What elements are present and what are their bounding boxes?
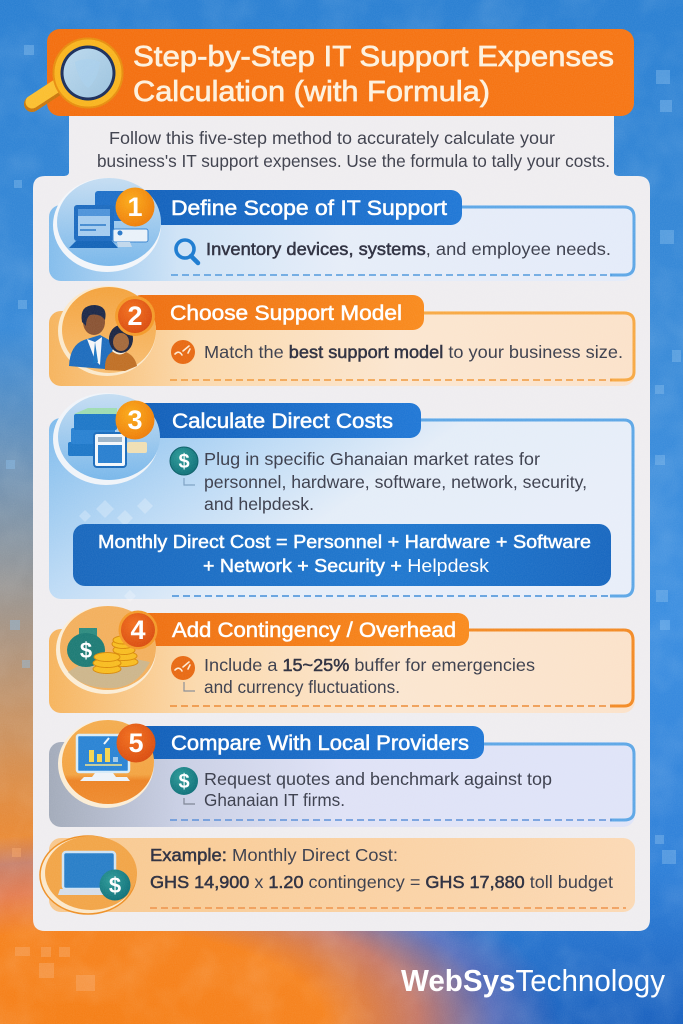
title text xyxy=(133,41,614,108)
step 4 circle icon: money bag and coins: $ xyxy=(80,638,92,663)
step 1 number badge xyxy=(116,188,154,226)
title text: Calculation (with Formula) xyxy=(133,76,490,108)
step 3 number badge xyxy=(116,400,154,440)
example circle icon: laptop and dollar xyxy=(40,836,137,914)
step 2 banner xyxy=(130,295,424,330)
panel: step 5 xyxy=(49,720,635,827)
step 5 text xyxy=(204,769,552,810)
panel: step 4 xyxy=(49,606,635,713)
step 3 text: Plug in specific Ghanaian market rates for xyxy=(204,449,540,469)
icon: dollar coin: $ xyxy=(178,771,190,793)
icon: magnifying glass xyxy=(32,38,122,108)
step 3 text: and helpdesk. xyxy=(204,494,314,514)
step 3 text xyxy=(204,449,587,514)
step 5 heading: Compare With Local Providers xyxy=(171,731,469,755)
step 5 circle icon: monitor with chart xyxy=(58,720,154,808)
icon: dollar coin xyxy=(170,767,198,804)
step 3 heading: Calculate Direct Costs xyxy=(172,409,393,433)
step 5 number badge xyxy=(116,724,156,762)
icon: dollar coin xyxy=(170,447,198,485)
icon: handshake xyxy=(171,340,195,364)
step 1 circle icon: computers xyxy=(53,178,161,272)
icon: dollar coin: $ xyxy=(178,451,190,473)
title text: Step-by-Step IT Support Expenses xyxy=(133,41,614,73)
step 2 circle icon: people xyxy=(58,286,156,376)
background pixel decoration xyxy=(6,45,681,864)
step 4 banner xyxy=(130,613,469,646)
step 3 text: personnel, hardware, software, network, security, xyxy=(204,472,587,492)
step 4 text: and currency fluctuations. xyxy=(204,677,400,697)
panel: example xyxy=(40,836,635,914)
step 5 text: Ghanaian IT firms. xyxy=(204,790,345,810)
step 4 heading: Add Contingency / Overhead xyxy=(172,618,456,642)
formula box: + Network + Security + Helpdesk xyxy=(203,555,490,576)
orange pixel decoration xyxy=(12,848,95,991)
example text xyxy=(150,845,613,892)
step 5 number badge: 5 xyxy=(128,728,144,758)
step 3 banner xyxy=(130,403,421,438)
step 1 text: Inventory devices, systems , and employee needs. xyxy=(206,239,611,259)
title banner xyxy=(47,29,634,116)
step 2 heading: Choose Support Model xyxy=(170,301,402,325)
step 4 text xyxy=(204,655,535,697)
panel: step 1 xyxy=(49,178,635,281)
intro text xyxy=(97,128,610,171)
intro text: Follow this five-step method to accurately calculate your xyxy=(109,128,555,148)
step 5 banner xyxy=(130,726,484,759)
icon: handshake xyxy=(171,656,195,691)
example circle icon: laptop and dollar: $ xyxy=(109,873,121,898)
step 4 text: Include a 15~25% buffer for emergencies xyxy=(204,655,535,675)
formula box: Monthly Direct Cost = Personnel + Hardware + Software xyxy=(98,531,591,552)
logo: WebSysTechnology: WebSysTechnology xyxy=(401,963,665,998)
panel: step 3 xyxy=(49,393,635,602)
icon: search xyxy=(176,240,198,263)
example text: Example: Monthly Direct Cost: xyxy=(150,845,398,865)
step 2 text: Match the best support model to your business size. xyxy=(204,342,623,362)
step 3 number badge: 3 xyxy=(127,405,143,435)
step 2 number badge: 2 xyxy=(127,301,143,331)
step 5 text: Request quotes and benchmark against top xyxy=(204,769,552,789)
example text: GHS 14,900 x 1.20 contingency = GHS 17,880 toll budget xyxy=(150,872,613,892)
panel: intro xyxy=(33,116,650,931)
step 4 circle icon: money bag and coins xyxy=(56,606,156,694)
panel: step 2 xyxy=(49,286,635,386)
formula box xyxy=(73,524,611,586)
step 2 number badge xyxy=(115,296,155,336)
step 4 number badge: 4 xyxy=(130,615,146,645)
step 1 banner xyxy=(94,190,462,225)
step 1 heading: Define Scope of IT Support xyxy=(171,196,447,220)
step 3 circle icon: money and calculator xyxy=(53,393,160,485)
step 4 number badge xyxy=(118,610,158,650)
step 1 number badge: 1 xyxy=(127,192,143,222)
intro text: business's IT support expenses. Use the formula to tally your costs. xyxy=(97,151,610,171)
diamond pattern xyxy=(79,498,153,602)
